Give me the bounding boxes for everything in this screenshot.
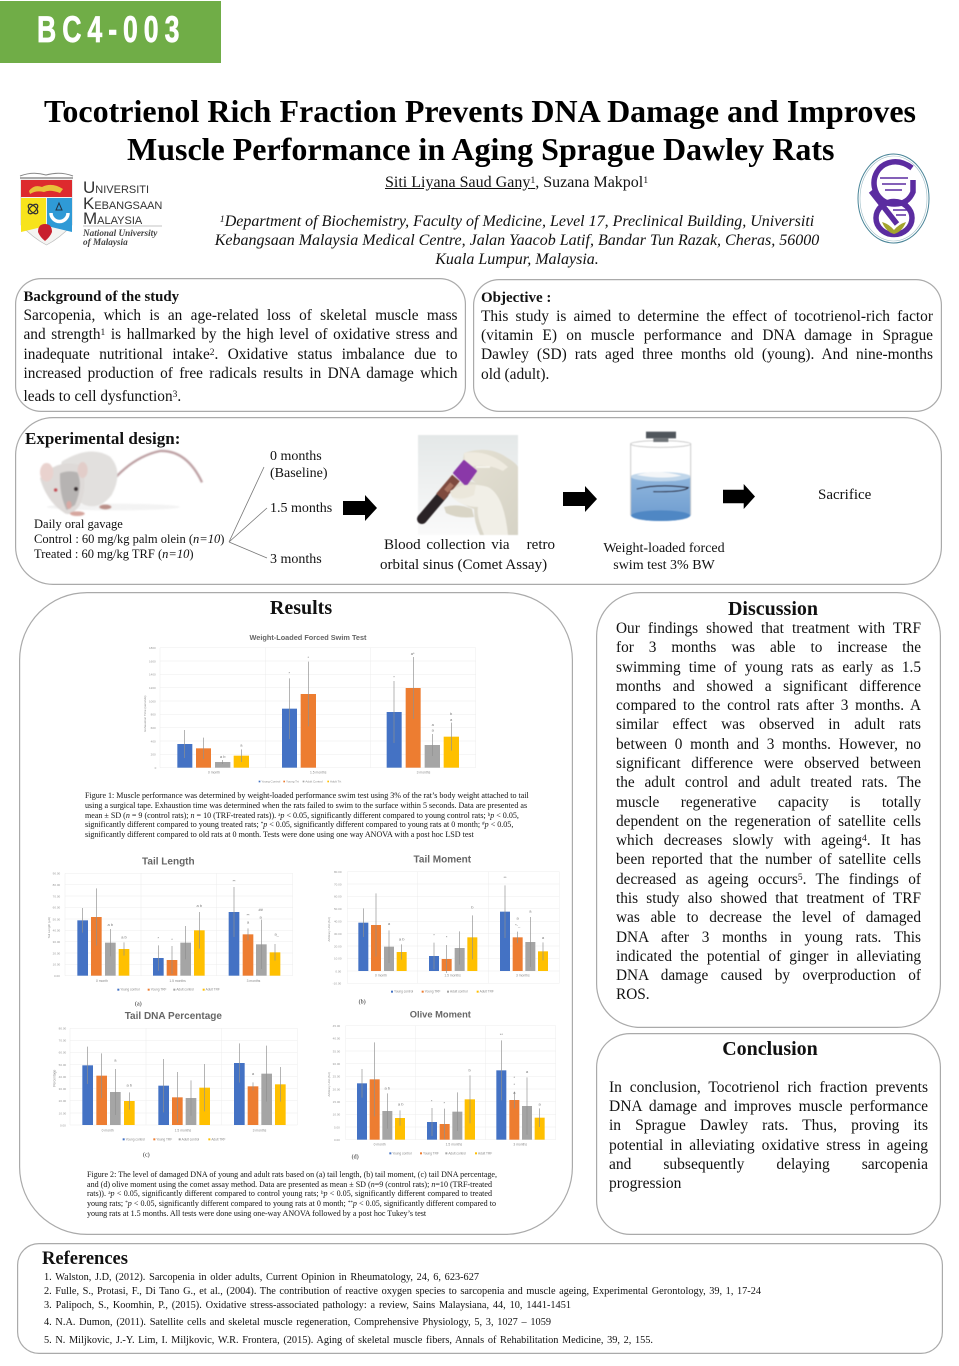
background text: and strength1 is hallmarked by the high level of oxidative stress and <box>24 326 458 343</box>
discussion text: DNA after 3 months in young rats. This <box>616 928 921 946</box>
chart: tail moment: Arbitrary Unit (AU) <box>327 917 331 942</box>
chart: tail moment: * <box>433 933 435 938</box>
affiliation: 1Department of Biochemistry, Faculty of Medicine, Level 17, Preclinical Building, Universiti <box>220 213 814 230</box>
chart: tail length: a <box>247 919 250 924</box>
chart: olive moment: Young control <box>392 1151 412 1155</box>
panel: results <box>19 592 573 1235</box>
chart: tail moment: 40.00 <box>334 920 342 924</box>
heading: conclusion: Conclusion <box>722 1038 818 1060</box>
discussion text: which decreases slowly with ageing4. It has <box>616 832 921 849</box>
chart: tail moment: 50.00 <box>334 907 342 911</box>
discussion text: compared to the control rats after 3 months. A <box>616 697 921 714</box>
chart: weight-loaded forced swim test: Young Trt <box>286 780 299 784</box>
chart: tail moment: a <box>542 935 545 940</box>
chart: olive moment: 15.00 <box>333 1100 341 1104</box>
swim test label: swim test 3% BW <box>613 558 715 572</box>
reference list: 1. Walston, J.D, (2012). Sarcopenia in older adults, Current Opinion in Rheumatology, 24, 6, 623-627 <box>44 1272 479 1283</box>
chart: weight-loaded forced swim test: a <box>432 728 435 733</box>
swim test label: Weight-loaded forced <box>603 541 725 556</box>
figure 1 caption: significantly different compared to young treated rats; *p < 0.05, significantly different compared to young rats at 0 month; #p < 0.05, <box>85 820 513 829</box>
chart: tail length: 30.00 <box>53 940 61 944</box>
chart: tail moment: 70.00 <box>334 882 342 886</box>
chart: olive moment: ** <box>500 1032 503 1037</box>
chart: tail DNA percentage: 70.00 <box>59 1039 67 1043</box>
panel: references <box>17 1243 943 1354</box>
chart: olive moment <box>327 1009 556 1160</box>
chart: tail moment: 20.00 <box>334 944 342 948</box>
chart: olive moment: (d) <box>352 1153 359 1160</box>
arrow <box>563 486 597 512</box>
chart: olive moment: a <box>539 1101 542 1106</box>
chart: olive moment: 35.00 <box>333 1049 341 1053</box>
chart: tail length: Young control <box>120 988 140 992</box>
chart: olive moment: Arbitrary Unit (AU) <box>327 1072 331 1097</box>
chart: weight-loaded forced swim test: a b <box>220 754 226 759</box>
reference list <box>44 1272 761 1346</box>
chart: weight-loaded forced swim test: Young Control <box>261 780 281 784</box>
discussion text: muscle regenerative capacity is totally <box>616 794 921 811</box>
chart: tail length: a b <box>121 934 128 939</box>
chart: tail moment: Tail Moment <box>414 854 472 865</box>
chart: weight-loaded forced swim test: 200 <box>151 753 156 757</box>
objective text: This study is aimed to determine the effect of tocotrienol-rich factor <box>481 308 933 325</box>
chart: weight-loaded forced swim test: 600 <box>151 726 156 730</box>
chart: tail DNA percentage: 40.00 <box>59 1075 67 1079</box>
background text: inadequate nutritional intake2. Oxidative status imbalance due to <box>24 346 458 362</box>
conclusion text: progression <box>609 1175 681 1192</box>
chart: tail length: Adult control <box>176 988 194 992</box>
chart: tail DNA percentage: 60.00 <box>59 1051 67 1055</box>
chart: olive moment: a <box>513 1090 516 1095</box>
chart: tail moment: b <box>471 904 474 909</box>
figure 1 caption: using a surgical tape. Exhaustion time was determined when the rats failed to swim to the surface within 5 seconds. Data are presented as <box>85 801 527 810</box>
chart: olive moment: * <box>514 1075 516 1080</box>
chart: weight-loaded forced swim test: 1800 <box>149 646 156 650</box>
chart: tail length: ## <box>258 907 264 912</box>
title: Tocotrienol Rich Fraction Prevents DNA Damage and Improves <box>44 92 916 128</box>
chart: tail length: * <box>158 935 160 940</box>
chart: tail DNA percentage: 1.5 months <box>175 1129 191 1133</box>
discussion text: was able to decrease the level of damaged <box>616 909 921 926</box>
chart: olive moment: 20.00 <box>333 1087 341 1091</box>
gavage text <box>34 517 224 561</box>
icon: swim test beaker <box>630 430 692 522</box>
chart: tail DNA percentage: 0 month <box>102 1129 114 1133</box>
chart: weight-loaded forced swim test: Exhaustion Time (seconds) <box>143 695 147 732</box>
chart: olive moment: * <box>514 1082 516 1087</box>
chart: tail moment: a <box>517 915 520 920</box>
background text <box>24 307 458 404</box>
chart: olive moment: b <box>469 1068 472 1073</box>
heading: results: Results <box>270 597 332 619</box>
reference list: 3. Palipoch, S., Koomhin, P., (2015). Oxidative stress-associated pathology: a review, Sains Malaysiana, 44, 10, 1441-1451 <box>44 1300 571 1311</box>
gavage text: Control : 60 mg/kg palm olein (n=10) <box>34 532 224 546</box>
chart: olive moment: Adult TRF <box>478 1151 492 1155</box>
chart: weight-loaded forced swim test: a <box>450 717 453 722</box>
objective text: Dawley (SD) rats aged three months old (young). And nine-months <box>481 346 933 363</box>
chart: weight-loaded forced swim test: 400 <box>151 739 156 743</box>
chart: weight-loaded forced swim test: * <box>393 674 395 679</box>
chart: tail length: 3 months <box>247 979 261 983</box>
chart: tail DNA percentage: (c) <box>143 1152 150 1159</box>
chart: olive moment: Olive Moment <box>410 1009 471 1019</box>
heading: discussion: Discussion <box>728 598 818 620</box>
chart: weight-loaded forced swim test: 1400 <box>149 673 156 677</box>
heading: background: Background of the study <box>24 289 179 305</box>
chart: tail DNA percentage: 50.00 <box>59 1063 67 1067</box>
affiliation: Kebangsaan Malaysia Medical Centre, Jalan Yaacob Latif, Bandar Tun Razak, Cheras, 56000 <box>215 232 819 249</box>
discussion text: DNA damage caused by overproduction of <box>616 967 921 984</box>
affiliation <box>214 213 820 268</box>
figure 2 caption: and (d) olive moment using the comet assay method. Data are presented as mean ± SD (n=9 (control rats); n=10 (TRF-treated <box>87 1180 492 1189</box>
figure 2 caption: young rats; *p < 0.05, significantly different compared to young rats at 0 month; **p < 0.05, significantly different compared to <box>87 1199 496 1208</box>
chart: tail moment: 80.00 <box>334 870 342 874</box>
chart: tail DNA percentage: 20.00 <box>59 1099 67 1103</box>
chart: tail length: Tail Length <box>142 856 195 867</box>
chart: tail moment: Young TRF <box>425 990 441 994</box>
chart: tail length: Tail Length (µm) <box>47 917 51 938</box>
chart: tail length <box>47 856 293 1008</box>
poster code banner: BC4-003 <box>37 9 185 50</box>
chart: tail moment: 0.00 <box>335 969 342 973</box>
chart: tail length: a b <box>108 922 114 927</box>
heading: experimental design: Experimental design: <box>25 429 180 448</box>
figure 2 caption: rats)). ap < 0.05, significantly different compared to control young rats; bp < 0.05, significantly different compared to treated <box>87 1189 492 1198</box>
timepoint: 0 months <box>270 449 328 481</box>
heading: objective: Objective : <box>481 290 551 306</box>
chart: tail length: 0.00 <box>54 974 60 978</box>
chart: tail length: ** <box>246 912 250 917</box>
chart: weight-loaded forced swim test: 0 <box>155 766 157 770</box>
chart: tail DNA percentage: 0.00 <box>60 1123 66 1127</box>
chart: olive moment: 3 months <box>513 1142 527 1146</box>
chart: tail length: Adult TRF <box>206 988 220 992</box>
chart: olive moment: 45.00 <box>333 1024 341 1028</box>
chart: tail moment: Young control <box>394 990 413 994</box>
panel: discussion <box>596 592 941 1028</box>
panel: experimental design <box>15 417 942 585</box>
chart: tail length: a <box>260 914 263 919</box>
chart: tail moment <box>327 854 560 1005</box>
chart: tail DNA percentage: 30.00 <box>59 1087 67 1091</box>
figure 1 caption: Figure 1: Muscle performance was determined by weight-loaded performance swim test using 3% of the rat’s body weight attached to tail <box>85 791 529 800</box>
discussion text <box>616 620 921 1003</box>
chart: tail length: 80.00 <box>53 883 61 887</box>
figure 2 caption: Figure 2: The level of damaged DNA of young and adult rats based on (a) tail length, (b) tail moment, (c) tail DNA percentage, <box>87 1170 497 1179</box>
chart: weight-loaded forced swim test: 800 <box>151 713 156 717</box>
chart: tail moment: Adult TRF <box>480 990 494 994</box>
chart: tail DNA percentage: Percentage <box>52 1069 56 1087</box>
discussion text: been reported that the number of satellite cells <box>616 851 921 868</box>
chart: weight-loaded forced swim test: Adult Trt <box>330 780 341 784</box>
logo: Universiti Kebangsaan Malaysia: MALAYSIA <box>83 209 143 228</box>
chart: tail length: 50.00 <box>53 917 61 921</box>
chart: weight-loaded forced swim test: * <box>308 655 310 660</box>
chart: weight-loaded forced swim test: 1200 <box>149 686 156 690</box>
discussion text: indicated the potential of ginger in alleviating <box>616 948 921 965</box>
background text: Sarcopenia, which is an age-related loss of skeletal muscle mass <box>24 307 458 324</box>
chart: tail DNA percentage: Adult control <box>182 1137 200 1141</box>
conclusion text: in Sprague Dawley rats. Thus, proving its <box>609 1117 928 1134</box>
chart: tail DNA percentage: Young control <box>126 1137 145 1141</box>
chart: tail moment: * <box>446 934 448 939</box>
chart: tail DNA percentage <box>52 1011 298 1159</box>
chart: olive moment: Adult control <box>448 1151 466 1155</box>
chart: weight-loaded forced swim test: 1000 <box>149 699 156 703</box>
chart: weight-loaded forced swim test: a <box>240 743 243 748</box>
reference list: 5. N. Miljkovic, J.-Y. Lim, I. Miljkovic, W.R. Frontera, (2015). Aging of skeletal muscle fibers, Annals of Rehabilitation Medicine, 39, 2, 155. <box>44 1335 653 1346</box>
figure 1 caption <box>85 791 529 839</box>
chart: olive moment: a b <box>385 1086 391 1091</box>
conclusion text: and subsequently delaying sarcopenia <box>609 1156 928 1173</box>
icon: white rat <box>40 449 204 517</box>
panel: background of the study <box>15 278 466 412</box>
chart: tail moment: a b <box>399 937 405 942</box>
chart: weight-loaded forced swim test: 0 month <box>208 771 220 775</box>
chart: weight-loaded forced swim test: Weight-Loaded Forced Swim Test <box>250 633 367 642</box>
chart: tail DNA percentage: a <box>252 1071 255 1076</box>
chart: tail moment: 0 month <box>375 974 387 978</box>
chart: weight-loaded forced swim test: 1600 <box>149 659 156 663</box>
chart: tail moment: (b) <box>359 998 366 1005</box>
timepoint branch lines <box>228 466 268 558</box>
heading: references: References <box>42 1249 128 1269</box>
background text: leads to cell dysfunction3. <box>24 388 181 404</box>
chart: olive moment: Young TRF <box>423 1151 439 1155</box>
discussion text: swimming time of young rats as early as 1.5 <box>616 659 921 676</box>
sacrifice label: Sacrifice <box>818 487 871 503</box>
chart: tail DNA percentage: Adult TRF <box>211 1137 226 1141</box>
chart: tail DNA percentage: a <box>114 1058 117 1063</box>
chart: tail length: 10.00 <box>53 963 61 967</box>
discussion text: dependent on the regeneration of satellite cells <box>616 813 921 830</box>
chart: tail moment: a <box>388 921 391 926</box>
title <box>44 92 916 167</box>
figure 2 caption: young rats at 1.5 months. All tests were done using one-way ANOVA followed by a post hoc Tukey’s test <box>87 1209 426 1218</box>
chart: tail moment: 3 months <box>516 974 530 978</box>
chart: tail length: 20.00 <box>53 951 61 955</box>
logo: Universiti Kebangsaan Malaysia: National University <box>82 228 158 238</box>
chart: olive moment: 40.00 <box>333 1037 341 1041</box>
chart: weight-loaded forced swim test <box>143 633 476 784</box>
discussion text: similar effect was observed in adult rats <box>616 716 921 733</box>
chart: tail DNA percentage: 80.00 <box>59 1027 67 1031</box>
chart: tail moment: ** <box>503 875 507 880</box>
discussion text: significant difference were observed between <box>616 755 921 772</box>
reference list: 2. Fulle, S., Protasi, F., Di Tano G., et al., (2004). The contribution of reactive oxygen species to sarcopenia and muscle ageing, Experimental Gerontology, 39, 1, 17-24 <box>44 1286 761 1297</box>
chart: tail moment: 10.00 <box>334 957 342 961</box>
objective text: (vitamin E) on muscle performance and DNA damage in Sprague <box>481 327 933 344</box>
reference list: 4. N.A. Dumon, (2011). Satellite cells and skeletal muscle regeneration, Comprehensive Physiology, 5, 3, 1027 – 1059 <box>44 1317 551 1328</box>
figure 1 caption: mean ± SD (n = 9 (control rats); n = 10 (TRF-treated rats)). ap < 0.05, significantly different compared to young control rats; bp < 0.05, <box>85 811 519 820</box>
chart: olive moment: * <box>444 1100 446 1105</box>
chart: olive moment: 25.00 <box>333 1075 341 1079</box>
chart: weight-loaded forced swim test: Adult Control <box>305 780 323 784</box>
chart: tail length: ** <box>232 878 236 883</box>
title: Muscle Performance in Aging Sprague Dawley Rats <box>127 131 834 167</box>
chart: weight-loaded forced swim test: 1.5 months <box>310 771 327 775</box>
chart: olive moment: 5.00 <box>334 1125 340 1129</box>
logo: Universiti Kebangsaan Malaysia <box>20 172 162 247</box>
conclusion text: potential in alleviating oxidative stress in ageing <box>609 1137 928 1154</box>
chart: tail length: Young TRF <box>151 988 167 992</box>
swim test label <box>603 541 725 572</box>
chart: tail length: * <box>171 937 173 942</box>
logo: Universiti Kebangsaan Malaysia: of Malaysia <box>83 237 128 247</box>
chart: tail moment: 1.5 months <box>444 974 461 978</box>
chart: tail moment: -10.00 <box>333 982 342 986</box>
chart: tail DNA percentage: Young TRF <box>156 1137 172 1141</box>
timepoint: 1.5 months: 1.5 months <box>270 501 332 516</box>
affiliation: Kuala Lumpur, Malaysia. <box>435 251 599 268</box>
chart: tail moment: 60.00 <box>334 895 342 899</box>
chart: weight-loaded forced swim test: b <box>450 711 453 716</box>
discussion text: months and showed a significant difference <box>616 678 921 695</box>
chart: tail DNA percentage: 10.00 <box>59 1111 67 1115</box>
blood collection label: Blood collection via retro <box>384 537 555 553</box>
chart: olive moment: 0 month <box>374 1142 386 1146</box>
chart: tail DNA percentage: 3 months <box>253 1129 267 1133</box>
discussion text: Our findings showed that treatment with TRF <box>616 620 921 637</box>
arrow <box>723 484 755 509</box>
timepoint: 3 months: 3 months <box>270 552 322 567</box>
chart: tail DNA percentage: Tail DNA Percentage <box>125 1011 222 1022</box>
logo: Universiti Kebangsaan Malaysia: UNIVERSITI <box>83 178 149 197</box>
chart: olive moment: 30.00 <box>333 1062 341 1066</box>
arrow <box>343 495 377 521</box>
panel: conclusion <box>596 1033 941 1235</box>
chart: olive moment: 1.5 months <box>446 1142 462 1146</box>
chart: weight-loaded forced swim test: * <box>289 670 291 675</box>
chart: tail moment: *-_ <box>515 923 521 928</box>
discussion text: between 0 month and 3 months. However, no <box>616 736 921 753</box>
blood collection label: orbital sinus (Comet Assay) <box>380 556 547 572</box>
gavage text: Treated : 60 mg/kg TRF (n=10) <box>34 547 194 561</box>
poster code banner <box>0 1 221 63</box>
chart: weight-loaded forced swim test: a <box>432 722 435 727</box>
objective text <box>481 308 933 383</box>
logo: Universiti Kebangsaan Malaysia: KEBANGSAAN <box>83 194 162 213</box>
chart: tail length: 90.00 <box>53 872 61 876</box>
chart: tail moment: a <box>529 909 532 914</box>
chart: tail length: (a) <box>135 1001 142 1008</box>
timepoint: 0 months: (Baseline) <box>270 466 328 481</box>
photo: blood collection tube <box>416 434 518 536</box>
chart: olive moment: a b <box>398 1102 404 1107</box>
background text: increased production of free radicals results in DNA damage which <box>24 365 458 382</box>
discussion text: for 3 months was able to increase the <box>616 639 921 656</box>
chart: weight-loaded forced swim test: a* <box>411 651 415 656</box>
chart: tail moment: 30.00 <box>334 932 342 936</box>
discussion text: this study also showed that treatment of TRF <box>616 890 921 907</box>
chart: tail length: a b <box>197 903 203 908</box>
chart: olive moment: * <box>431 1099 433 1104</box>
timepoint: 0 months: 0 months <box>270 449 322 464</box>
logo: purple snake emblem <box>858 154 930 244</box>
discussion text: ROS. <box>616 986 650 1003</box>
blood collection label <box>380 537 555 572</box>
chart: tail length: 40.00 <box>53 929 61 933</box>
chart: tail length: 1.5 months <box>169 979 186 983</box>
chart: weight-loaded forced swim test: 3 months <box>417 771 431 775</box>
chart: tail length: 60.00 <box>53 906 61 910</box>
chart: tail DNA percentage: a b <box>127 1083 133 1088</box>
chart: tail length: 0 month <box>96 979 108 983</box>
chart: tail length: a_ <box>274 932 280 937</box>
conclusion text: In conclusion, Tocotrienol rich fraction prevents <box>609 1079 928 1096</box>
figure 1 caption: significantly different compared to old rats at 0 month. Tests were done using one way ANOVA with a post hoc LSD test <box>85 830 474 839</box>
authors: Siti Liyana Saud Gany1, Suzana Makpol1 <box>385 174 648 191</box>
chart: olive moment: 0.00 <box>334 1138 340 1142</box>
figure 2 caption <box>87 1170 497 1218</box>
chart: olive moment: 10.00 <box>333 1113 341 1117</box>
objective text: old (adult). <box>481 366 549 383</box>
chart: tail moment: Adult control <box>450 990 468 994</box>
discussion text: decreased as ageing occurs5. The findings of <box>616 871 921 888</box>
chart: tail length: 70.00 <box>53 894 61 898</box>
gavage text: Daily oral gavage <box>34 517 123 531</box>
chart: olive moment: a <box>526 1069 529 1074</box>
panel: objective <box>473 279 942 412</box>
conclusion text: DNA damage and improves muscle performance <box>609 1098 928 1115</box>
discussion text: the adult control and adult treated rats. The <box>616 774 921 791</box>
conclusion text <box>609 1079 928 1192</box>
